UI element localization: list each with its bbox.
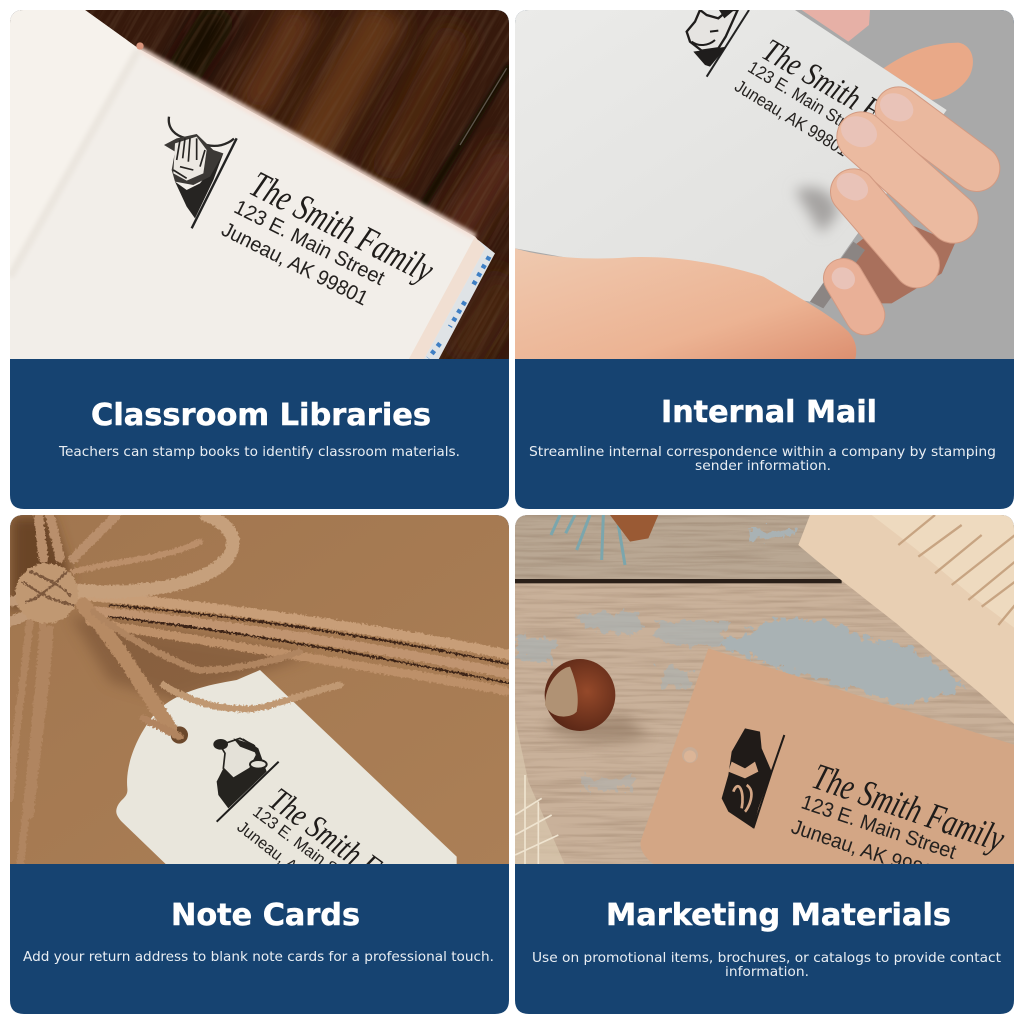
stamped address text <box>237 788 384 864</box>
envelope <box>515 10 947 302</box>
stamped address text: 123 E. Main Street <box>249 802 367 898</box>
description: Teachers can stamp books to identify classroom materials. <box>58 445 460 460</box>
icon: rabbit <box>687 10 749 77</box>
thumb <box>883 43 973 100</box>
fingers <box>828 88 977 315</box>
photo: kraft tag on weathered wood <box>515 515 1015 888</box>
card: Classroom Libraries <box>10 10 509 509</box>
photo: hands holding envelope <box>515 10 1015 360</box>
description: Add your return address to blank note cards for a professional touch. <box>23 950 494 965</box>
photo: open book on wood table <box>10 10 509 359</box>
wrapped parcel with burlap <box>798 515 1015 725</box>
card: Note Cards <box>10 515 510 1014</box>
description: Streamline internal correspondence within a company by stamping <box>529 445 996 460</box>
heading: Classroom Libraries <box>91 398 431 433</box>
book cover edge with blue pattern <box>423 240 495 360</box>
heading: Note Cards <box>171 898 360 933</box>
stamped address text <box>791 764 1004 864</box>
hazelnut <box>545 659 615 731</box>
nails <box>828 88 918 294</box>
heading: Internal Mail <box>661 395 877 430</box>
kraft tag <box>640 648 1015 865</box>
description: Use on promotional items, brochures, or catalogs to provide contact <box>532 951 1001 966</box>
hand <box>515 248 856 360</box>
stamped address text: 123 E. Main Street <box>798 791 959 864</box>
icon: sheep <box>213 738 279 822</box>
weathered paint patches <box>515 528 965 790</box>
stamped address text: The Smith Family <box>262 781 435 921</box>
stamped address text: 123 E. Main Street <box>230 196 388 290</box>
pine sprig <box>551 515 648 565</box>
description: information. <box>725 965 809 980</box>
icon: rooster <box>722 728 784 828</box>
stamped address text: The Smith Family <box>243 164 440 292</box>
stamped address text <box>222 172 433 306</box>
stamped address text: Juneau, AK 99801 <box>731 76 852 160</box>
stamped address text: 123 E. Main Street <box>745 57 869 143</box>
photo: tag with twine on kraft parcel <box>10 515 509 864</box>
stamped address text: Juneau, AK 99801 <box>234 817 348 912</box>
icon: highland cow <box>164 117 237 228</box>
stamped address text: Juneau, AK 99801 <box>218 218 372 310</box>
gift tag <box>116 670 457 865</box>
heading: Marketing Materials <box>606 898 951 933</box>
card: Internal Mail <box>515 10 1015 509</box>
description: sender information. <box>695 459 831 474</box>
stamped address text: The Smith Family <box>756 32 939 159</box>
card: Marketing Materials <box>515 515 1015 1014</box>
stamped address text: Juneau, AK 99801 <box>788 815 946 888</box>
twine <box>10 515 510 865</box>
burlap scrap <box>515 718 565 865</box>
